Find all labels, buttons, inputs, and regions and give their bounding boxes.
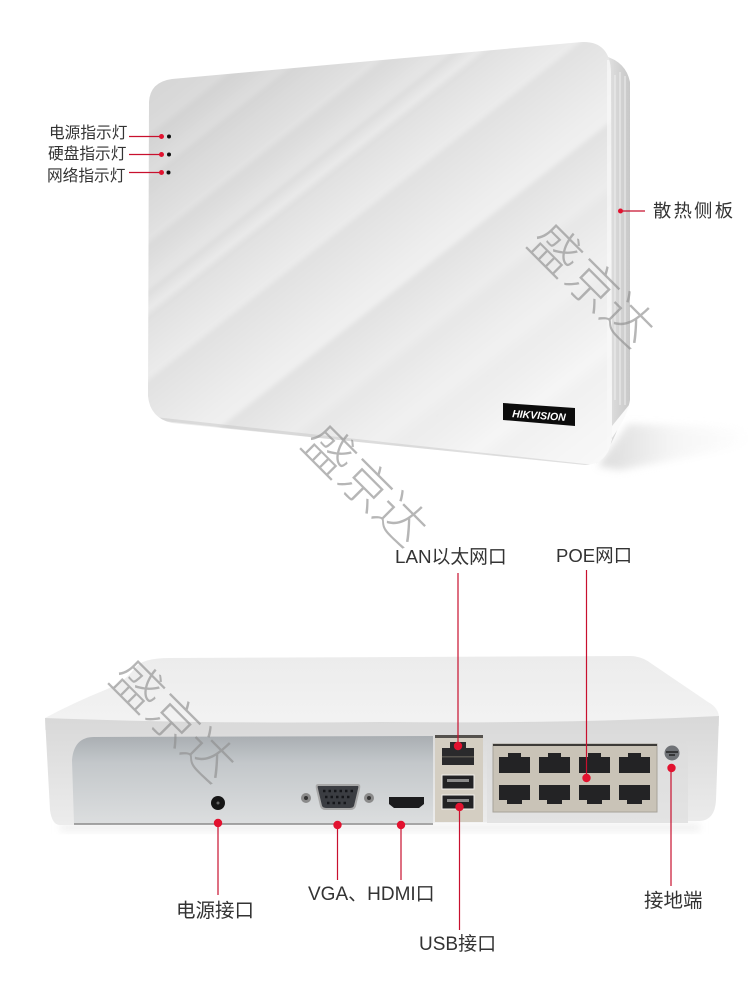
label: POE port	[556, 545, 632, 782]
HDMI port	[389, 797, 424, 808]
label: network indicator: 网络指示灯	[47, 166, 126, 185]
LAN and USB block	[435, 735, 483, 822]
shadow under device	[598, 424, 750, 470]
label: heat side panel: 散热侧板	[653, 200, 735, 221]
label: USB port: USB接口	[419, 933, 496, 955]
logo: HIKVISION: HIKVISION	[512, 408, 567, 424]
label: power port	[176, 819, 254, 922]
soft shadow	[60, 824, 700, 831]
device: top view of recorder	[148, 42, 683, 472]
POE port block	[487, 736, 688, 823]
label: VGA and HDMI: VGA、HDMI口	[308, 884, 435, 905]
watermark 2	[289, 405, 446, 560]
device: rear view of recorder	[45, 656, 719, 831]
rear recess	[72, 736, 433, 824]
front face	[148, 42, 612, 465]
label: LAN port: LAN以太网口	[395, 546, 507, 567]
label: power port: 电源接口	[176, 900, 254, 922]
label: disk indicator: 硬盘指示灯	[48, 144, 127, 163]
watermark 3	[97, 640, 254, 796]
top surface	[45, 656, 719, 730]
watermark 2: 京	[325, 440, 411, 526]
watermark 1: 京	[552, 240, 638, 326]
watermark 1: 盛	[515, 204, 601, 290]
label: ground terminal	[644, 764, 703, 912]
label: POE port: POE网口	[556, 545, 632, 566]
front panel	[45, 716, 719, 825]
watermark 3: 盛	[97, 640, 183, 726]
watermark 1: 达	[587, 275, 673, 361]
heat-dissipating side panel	[594, 56, 630, 464]
watermark 2: 盛	[289, 405, 375, 491]
label: ground terminal: 接地端	[644, 890, 703, 912]
ground screw	[664, 746, 680, 760]
watermark 3: 达	[168, 710, 254, 796]
watermark 3: 京	[133, 675, 219, 761]
watermark 1	[515, 204, 673, 361]
label: power indicator: 电源指示灯	[49, 124, 128, 142]
logo: HIKVISION	[503, 403, 575, 426]
watermark 2: 达	[360, 474, 446, 560]
label: VGA and HDMI	[308, 821, 435, 905]
label: USB port	[419, 803, 496, 955]
VGA port	[301, 785, 374, 809]
power jack	[211, 796, 225, 810]
label: LAN port	[395, 546, 507, 750]
indicator labels	[47, 124, 171, 185]
